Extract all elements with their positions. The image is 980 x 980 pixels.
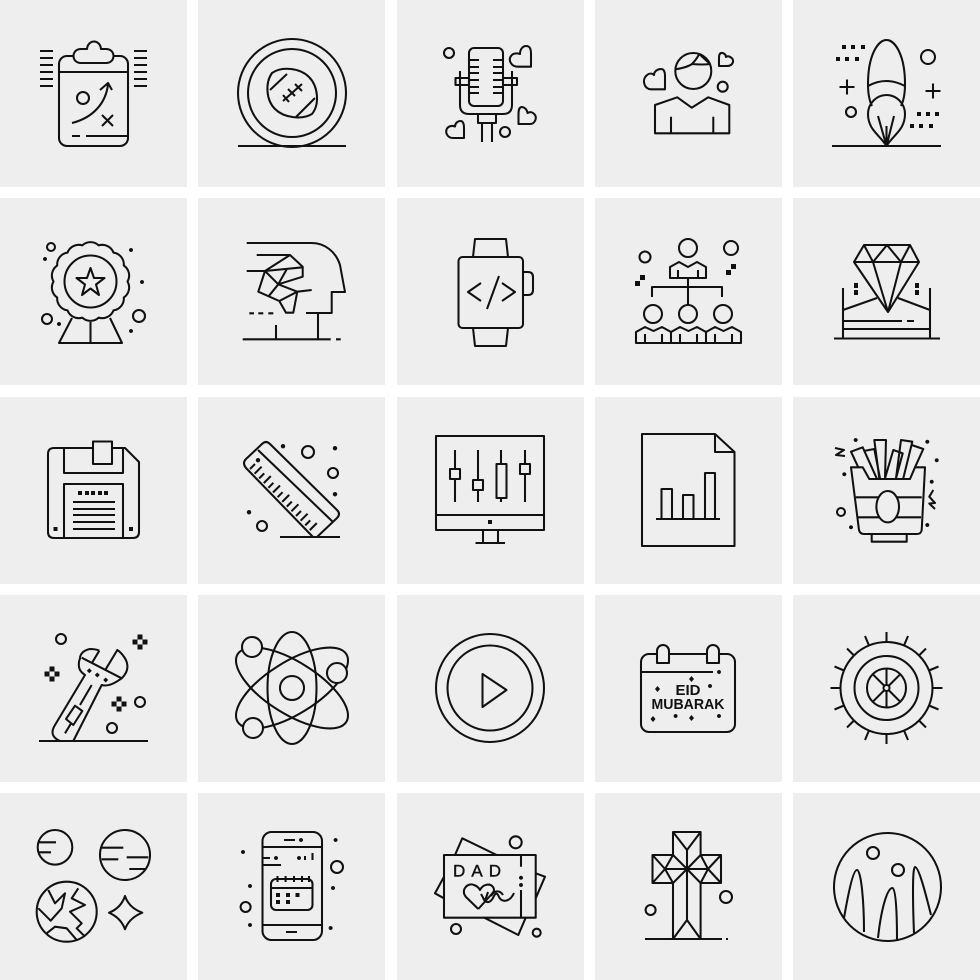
- icon: document with bar chart: [642, 434, 734, 546]
- icon: person with hearts: [644, 53, 733, 133]
- panel: badge: [0, 198, 187, 385]
- icon: Eid Mubarak calendar: [641, 645, 735, 732]
- icon: circle with peaks: [834, 833, 941, 941]
- panel: planets: [0, 793, 187, 980]
- panel: diamond: [793, 198, 980, 385]
- panel: wrench: [0, 595, 187, 782]
- icon: father's day card: [435, 836, 545, 937]
- panel: monitor: [397, 397, 584, 584]
- panel: calendar: [595, 595, 782, 782]
- panel: football: [198, 0, 385, 187]
- panel: feather: [793, 0, 980, 187]
- panel: head: [198, 198, 385, 385]
- icon: smartwatch code: [458, 239, 533, 346]
- panel: wheel: [793, 595, 980, 782]
- panel: fries: [793, 397, 980, 584]
- panel: team: [595, 198, 782, 385]
- icon: diamond in ring: [834, 245, 940, 339]
- icon: play button: [436, 634, 544, 742]
- icon: star award badge: [42, 242, 145, 343]
- panel: microphone: [397, 0, 584, 187]
- icon: phone with calendar: [241, 832, 343, 940]
- icon: atom: [224, 632, 360, 744]
- icon: ruler: [244, 442, 340, 537]
- panel: abstract circle: [793, 793, 980, 980]
- icon: tyre wheel: [830, 632, 942, 744]
- icon: team hierarchy: [635, 239, 741, 343]
- panel: cross: [595, 793, 782, 980]
- panel: dad card: [397, 793, 584, 980]
- icon: feather nib: [832, 40, 941, 146]
- panel: smartwatch: [397, 198, 584, 385]
- icon: football in ring: [238, 39, 346, 147]
- icon: wrench: [39, 634, 148, 741]
- icon: cross: [645, 832, 732, 940]
- panel: ruler: [198, 397, 385, 584]
- panel: phone calendar: [198, 793, 385, 980]
- card text: DAD: [453, 862, 501, 881]
- icon: french fries: [835, 438, 939, 542]
- panel: clipboard: [0, 0, 187, 187]
- panel: play: [397, 595, 584, 782]
- icon: floppy disk: [48, 442, 139, 538]
- calendar text: EID: [675, 682, 701, 699]
- panel: person: [595, 0, 782, 187]
- panel: atom: [198, 595, 385, 782]
- panel: floppy: [0, 397, 187, 584]
- icon: planets and star: [37, 830, 150, 942]
- panel: document: [595, 397, 782, 584]
- icon: Eid Mubarak calendar: MUBARAK: [652, 696, 725, 713]
- icon: monitor with sliders: [436, 436, 544, 543]
- icon: microphone with hearts: [444, 46, 536, 142]
- icon: clipboard play diagram: [40, 42, 147, 146]
- icon: head with polygon brain: [243, 243, 345, 339]
